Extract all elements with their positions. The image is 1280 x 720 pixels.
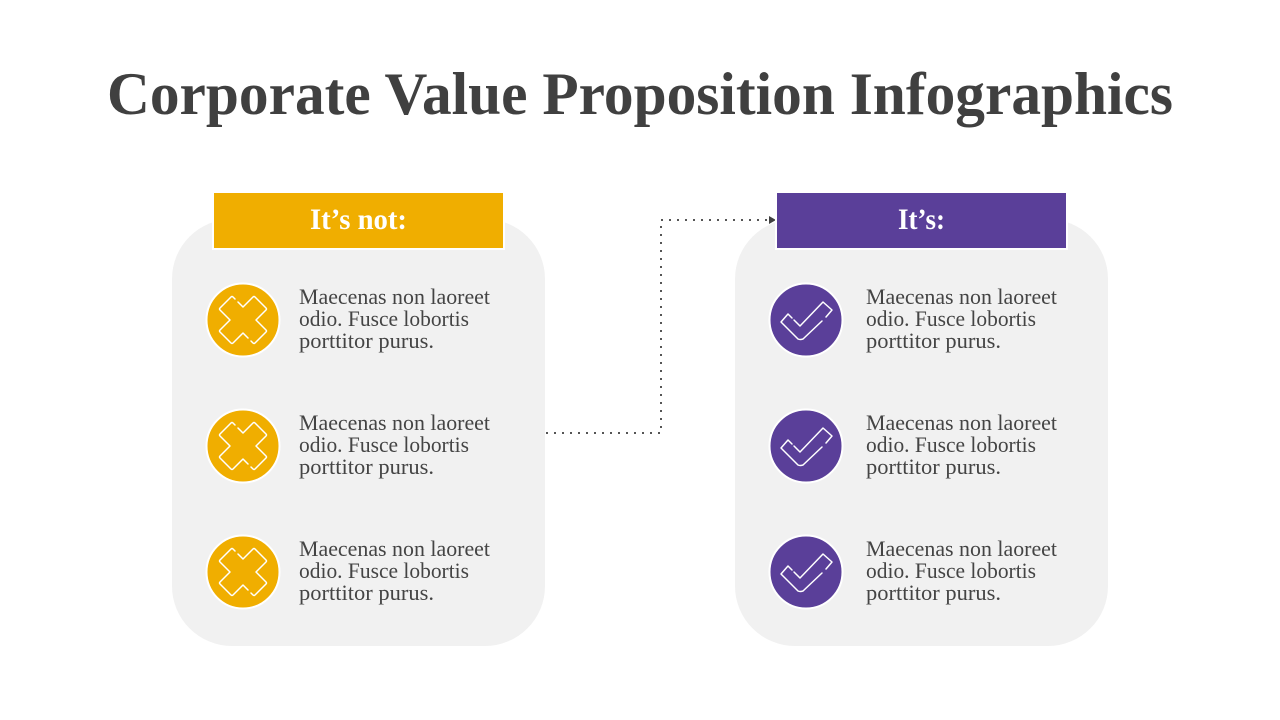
text block: left item 2: Maecenas non laoreet (299, 410, 490, 435)
text block: right item 2 (866, 410, 1057, 479)
heading: it's (776, 192, 1067, 249)
heading: it's not (213, 192, 504, 249)
icon: check 2 (770, 410, 842, 482)
icon: check 1 (770, 284, 842, 356)
text block: left item 3 (299, 536, 490, 605)
text block: left item 2: porttitor purus. (299, 454, 434, 479)
text block: right item 2: Maecenas non laoreet (866, 410, 1057, 435)
panel: it's (735, 192, 1108, 646)
text block: right item 3: porttitor purus. (866, 580, 1001, 605)
text block: right item 2: odio. Fusce lobortis (866, 432, 1036, 457)
panel: it's not (172, 192, 545, 646)
arrow: dotted connector from left panel to right header (546, 216, 776, 433)
text block: left item 1: odio. Fusce lobortis (299, 306, 469, 331)
heading: it's not: It’s not: (310, 203, 407, 236)
text block: left item 1: Maecenas non laoreet (299, 284, 490, 309)
text block: right item 1: odio. Fusce lobortis (866, 306, 1036, 331)
text block: left item 3: odio. Fusce lobortis (299, 558, 469, 583)
icon: cross 3 (206, 536, 280, 608)
text block: right item 1: porttitor purus. (866, 328, 1001, 353)
text block: left item 3: Maecenas non laoreet (299, 536, 490, 561)
text block: left item 2: odio. Fusce lobortis (299, 432, 469, 457)
text block: right item 3 (866, 536, 1057, 605)
text block: left item 1 (299, 284, 490, 353)
text block: right item 3: Maecenas non laoreet (866, 536, 1057, 561)
heading: it's: It’s: (898, 203, 945, 236)
text block: left item 2 (299, 410, 490, 479)
panel background left (172, 219, 545, 646)
text block: right item 3: odio. Fusce lobortis (866, 558, 1036, 583)
panel background right (735, 219, 1108, 646)
text block: right item 2: porttitor purus. (866, 454, 1001, 479)
icon: cross 2 (206, 410, 280, 482)
text block: left item 1: porttitor purus. (299, 328, 434, 353)
text block: right item 1 (866, 284, 1057, 353)
icon: check 3 (770, 536, 842, 608)
text block: right item 1: Maecenas non laoreet (866, 284, 1057, 309)
icon: cross 1 (206, 284, 280, 356)
title: Corporate Value Proposition Infographics (107, 61, 1173, 127)
text block: left item 3: porttitor purus. (299, 580, 434, 605)
